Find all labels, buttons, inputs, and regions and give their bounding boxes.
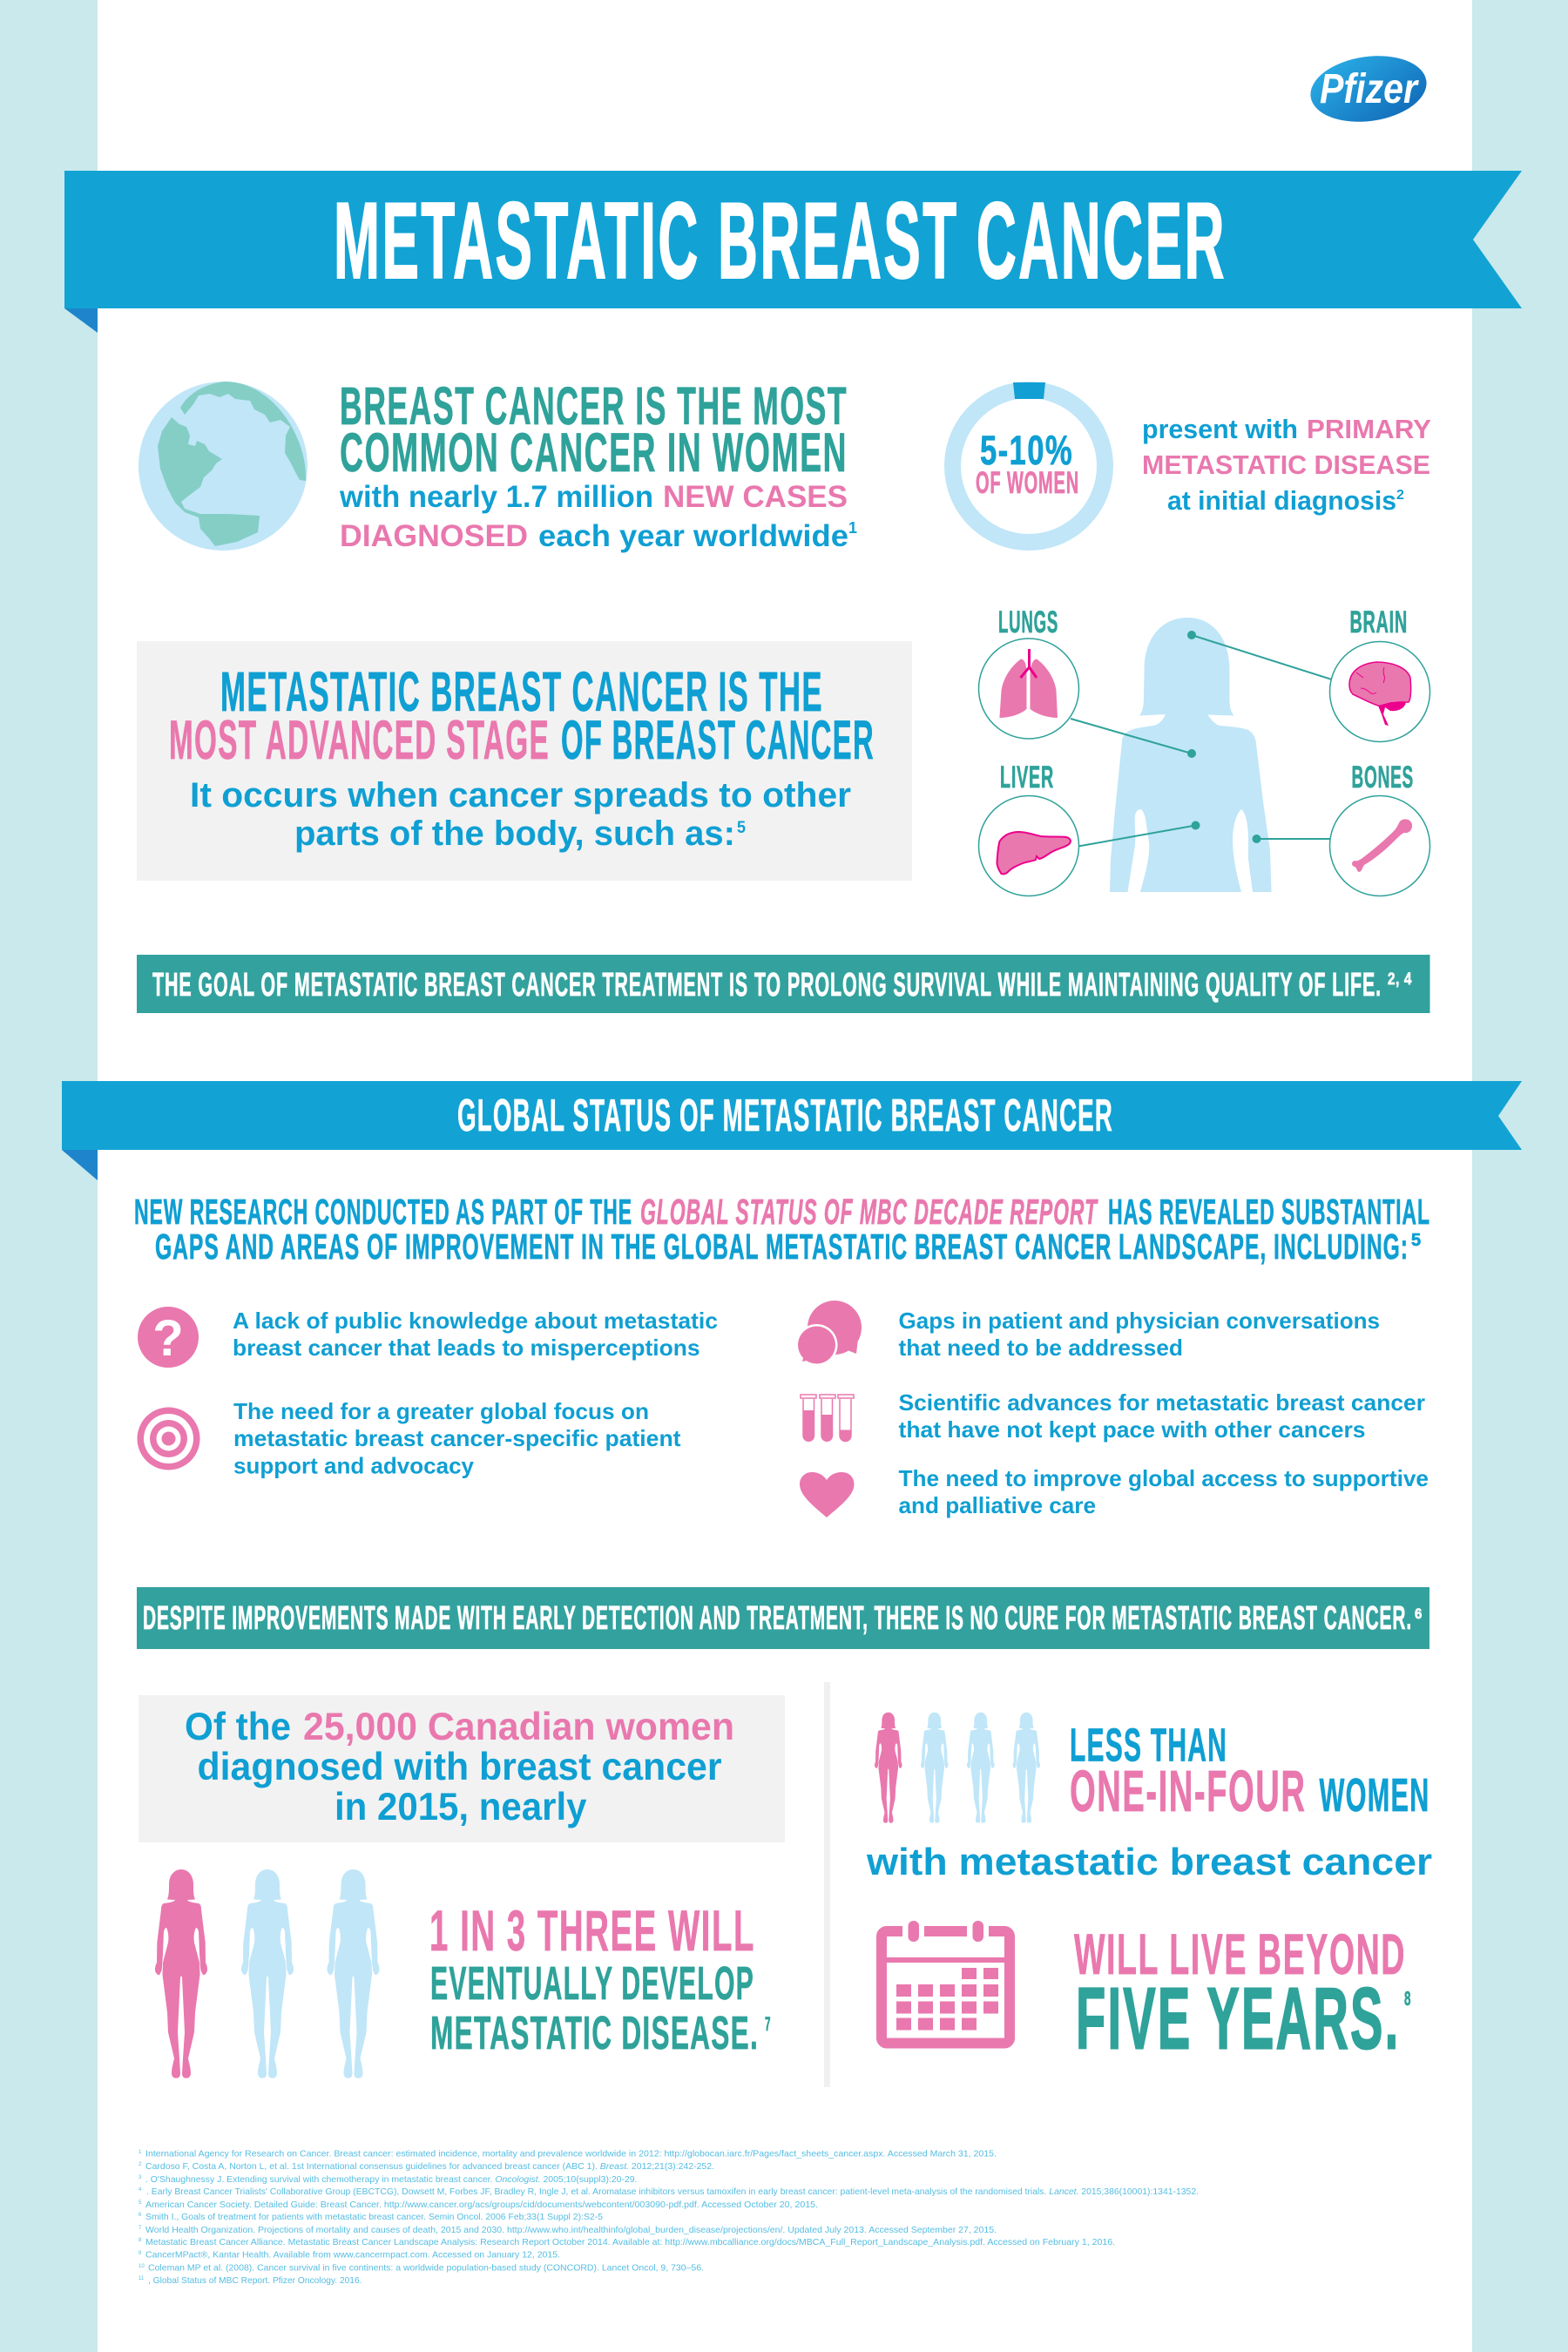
banner: no cure — [137, 1587, 1429, 1649]
headline: most common cancer: DIAGNOSED — [340, 519, 528, 553]
body diagram — [979, 605, 1430, 896]
panel: most advanced stage — [137, 641, 912, 881]
text: five years: 8 — [1404, 1987, 1411, 2010]
text: 1 in 3: 1 IN 3 THREE WILL — [429, 1898, 755, 1963]
text: five years — [1074, 1922, 1411, 2068]
donut: 5-10% of women: OF WOMEN — [976, 466, 1079, 500]
organ: lungs — [979, 605, 1078, 739]
donut: 5-10% of women — [953, 382, 1105, 542]
organ: brain: BRAIN — [1350, 605, 1408, 639]
vertical divider — [824, 1682, 830, 2087]
panel: Canadian women — [139, 1695, 785, 1842]
references: . O'Shaughnessy J. Extending survival with chemotherapy in metastatic breast cancer. Oncologist. 2005;10(suppl3):20-29. — [145, 2174, 638, 2185]
panel: Canadian women: 25,000 Canadian women — [303, 1706, 734, 1748]
text: one in four: ONE-IN-FOUR — [1070, 1759, 1307, 1824]
item: supportive care — [800, 1465, 1429, 1518]
headline: most common cancer: COMMON CANCER IN WOMEN — [340, 422, 848, 483]
icon: question mark: ? — [152, 1310, 184, 1367]
item: conversations: that need to be addressed — [899, 1335, 1183, 1361]
references: , Global Status of MBC Report. Pfizer Oncology. 2016. — [148, 2275, 362, 2286]
text: one in four: LESS THAN — [1070, 1720, 1227, 1772]
references: American Cancer Society. Detailed Guide: Breast Cancer. http://www.cancer.org/acs/groups/cid/documents/webcontent/003090-pdf.pdf. Accessed October 20, 2015. — [145, 2200, 818, 2210]
references: 10 — [139, 2264, 145, 2269]
organ: bones — [1329, 760, 1430, 896]
item: global focus: The need for a greater global focus on — [233, 1398, 649, 1424]
intro heading: new research: NEW RESEARCH CONDUCTED AS PART OF THE — [134, 1192, 632, 1232]
references: 1 — [139, 2150, 142, 2155]
item: public knowledge: A lack of public knowledge about metastatic — [233, 1308, 718, 1334]
icon: calendar — [876, 1921, 1015, 2044]
text: 1 in 3 — [429, 1898, 771, 2059]
headline: most common cancer: each year worldwide — [538, 519, 848, 553]
organ: liver — [979, 760, 1078, 896]
banner: goal of treatment: 2, 4 — [1388, 970, 1412, 989]
references: 11 — [139, 2276, 145, 2281]
references: World Health Organization. Projections of mortality and causes of death, 2015 and 2030. http://www.who.int/healthinfo/global_burden_disease/projections/en/. Updated July 2013. Accessed September 27, 2015. — [145, 2225, 997, 2235]
references: 3 — [139, 2175, 142, 2180]
item: global focus — [138, 1398, 681, 1479]
panel: Canadian women: Of the — [185, 1706, 291, 1748]
item: public knowledge: breast cancer that leads to misperceptions — [233, 1335, 700, 1361]
headline: most common cancer: with nearly 1.7 million — [339, 480, 653, 514]
logo: Pfizer: Pfizer — [1320, 66, 1419, 112]
item: global focus: metastatic breast cancer-specific patient — [233, 1425, 681, 1451]
connector lines — [1071, 635, 1332, 847]
intro heading: new research: GLOBAL STATUS OF MBC DECADE REPORT — [640, 1192, 1098, 1232]
text: 1 in 3: 7 — [765, 2013, 771, 2035]
references: 6 — [139, 2213, 142, 2218]
item: global focus: support and advocacy — [233, 1453, 475, 1479]
references: Smith I., Goals of treatment for patients with metastatic breast cancer. Semin Oncol. 2006 Feb;33(1 Suppl 2):S2-5 — [145, 2212, 603, 2222]
icon: speech bubbles — [796, 1301, 862, 1366]
text: one in four: WOMEN — [1319, 1769, 1430, 1821]
references: Coleman MP et al. (2008). Cancer survival in five continents: a worldwide population-based study (CONCORD). Lancet Oncol, 9, 730–56. — [148, 2263, 704, 2274]
references — [139, 2149, 1199, 2286]
text: 1 in 3: METASTATIC DISEASE. — [430, 2007, 759, 2059]
organ: bones: BONES — [1352, 760, 1414, 794]
organ: brain — [1329, 605, 1430, 742]
icon: heart — [800, 1472, 854, 1517]
text: 1 in 3: EVENTUALLY DEVELOP — [430, 1957, 754, 2010]
references: Cardoso F, Costa A, Norton L, et al. 1st International consensus guidelines for advanced breast cancer (ABC 1). Breast. 2012;21(3):242-252. — [145, 2161, 714, 2172]
logo: Pfizer — [1307, 49, 1430, 129]
references: . Early Breast Cancer Trialists' Collaborative Group (EBCTCG), Dowsett M, Forbes JF, Bradley R, Ingle J, et al. Aromatase inhibitors versus tamoxifen in early breast cancer: patient-level meta-analysis of the randomised trials. Lancet. 2015;386(10001):1341-1352. — [146, 2186, 1199, 2197]
item: supportive care: and palliative care — [899, 1492, 1096, 1518]
icon: globe — [139, 382, 308, 551]
references: Metastatic Breast Cancer Alliance. Metastatic Breast Cancer Landscape Analysis: Research Report October 2014. Available at: http://www.mbcalliance.org/docs/MBCA_Full_Report_Landscape_Analysis.pdf. Accessed on February 1, 2016. — [145, 2237, 1115, 2247]
headline: most common cancer — [339, 376, 857, 553]
panel: most advanced stage: MOST ADVANCED STAGE — [169, 710, 550, 771]
item: conversations — [796, 1301, 1380, 1366]
text: primary metastatic disease: 2 — [1396, 488, 1404, 503]
silhouette — [1110, 618, 1272, 892]
pictogram: 1 in 4 women — [875, 1713, 1040, 1823]
references: 8 — [139, 2238, 142, 2243]
panel: most advanced stage: 5 — [737, 819, 746, 837]
panel: Canadian women: diagnosed with breast cancer — [197, 1746, 721, 1788]
references: 4 — [139, 2187, 142, 2193]
headline: most common cancer: NEW CASES — [663, 480, 848, 514]
banner: no cure: 6 — [1415, 1605, 1423, 1622]
text: one in four: with metastatic breast cancer — [866, 1841, 1432, 1883]
connector dots — [1187, 631, 1261, 843]
panel: Canadian women: in 2015, nearly — [335, 1786, 587, 1828]
donut: 5-10% of women: 5-10% — [980, 427, 1073, 473]
intro heading: new research: 5 — [1411, 1231, 1422, 1250]
panel: most advanced stage: METASTATIC BREAST CANCER IS THE — [220, 660, 823, 723]
organ: liver: LIVER — [1000, 760, 1054, 794]
item: supportive care: The need to improve global access to supportive — [899, 1465, 1429, 1491]
pictogram: 1 in 3 women — [155, 1869, 380, 2078]
organ: lungs: LUNGS — [998, 605, 1058, 639]
banner: goal of treatment — [137, 955, 1430, 1013]
references: 7 — [139, 2226, 142, 2231]
item: scientific advances — [801, 1389, 1425, 1443]
icon: target — [138, 1408, 200, 1470]
headline: most common cancer: 1 — [848, 519, 857, 537]
references: 9 — [139, 2251, 142, 2256]
intro heading: new research — [134, 1192, 1430, 1267]
panel: most advanced stage: It occurs when cancer spreads to other — [190, 776, 851, 814]
text: one in four — [866, 1720, 1432, 1883]
text: primary metastatic disease: PRIMARY — [1307, 414, 1431, 444]
panel: most advanced stage: OF BREAST CANCER — [561, 710, 875, 771]
references: 5 — [139, 2200, 142, 2206]
icon: question mark — [138, 1307, 199, 1368]
item: scientific advances: that have not kept pace with other cancers — [899, 1416, 1366, 1443]
title ribbon — [64, 171, 1522, 333]
item: scientific advances: Scientific advances for metastatic breast cancer — [899, 1389, 1425, 1416]
panel: most advanced stage: parts of the body, such as: — [294, 814, 735, 853]
text: primary metastatic disease — [1142, 414, 1431, 516]
icon: test tubes — [801, 1395, 854, 1441]
text: primary metastatic disease: METASTATIC DISEASE — [1142, 449, 1430, 480]
references: 2 — [139, 2162, 142, 2167]
references: International Agency for Research on Cancer. Breast cancer: estimated incidence, mortality and prevalence worldwide in 2012: http://globocan.iarc.fr/Pages/fact_sheets_cancer.aspx. Accessed March 31, 2015. — [145, 2149, 997, 2159]
item: public knowledge — [138, 1307, 718, 1368]
text: primary metastatic disease: at initial diagnosis — [1167, 485, 1396, 516]
text: primary metastatic disease: present with — [1142, 414, 1298, 444]
headline: most common cancer: BREAST CANCER IS THE MOST — [340, 376, 848, 436]
references: CancerMPact®, Kantar Health. Available from www.cancermpact.com. Accessed on January 12, 2015. — [145, 2250, 560, 2261]
item: conversations: Gaps in patient and physician conversations — [899, 1308, 1380, 1334]
section ribbon: global status — [62, 1081, 1522, 1180]
